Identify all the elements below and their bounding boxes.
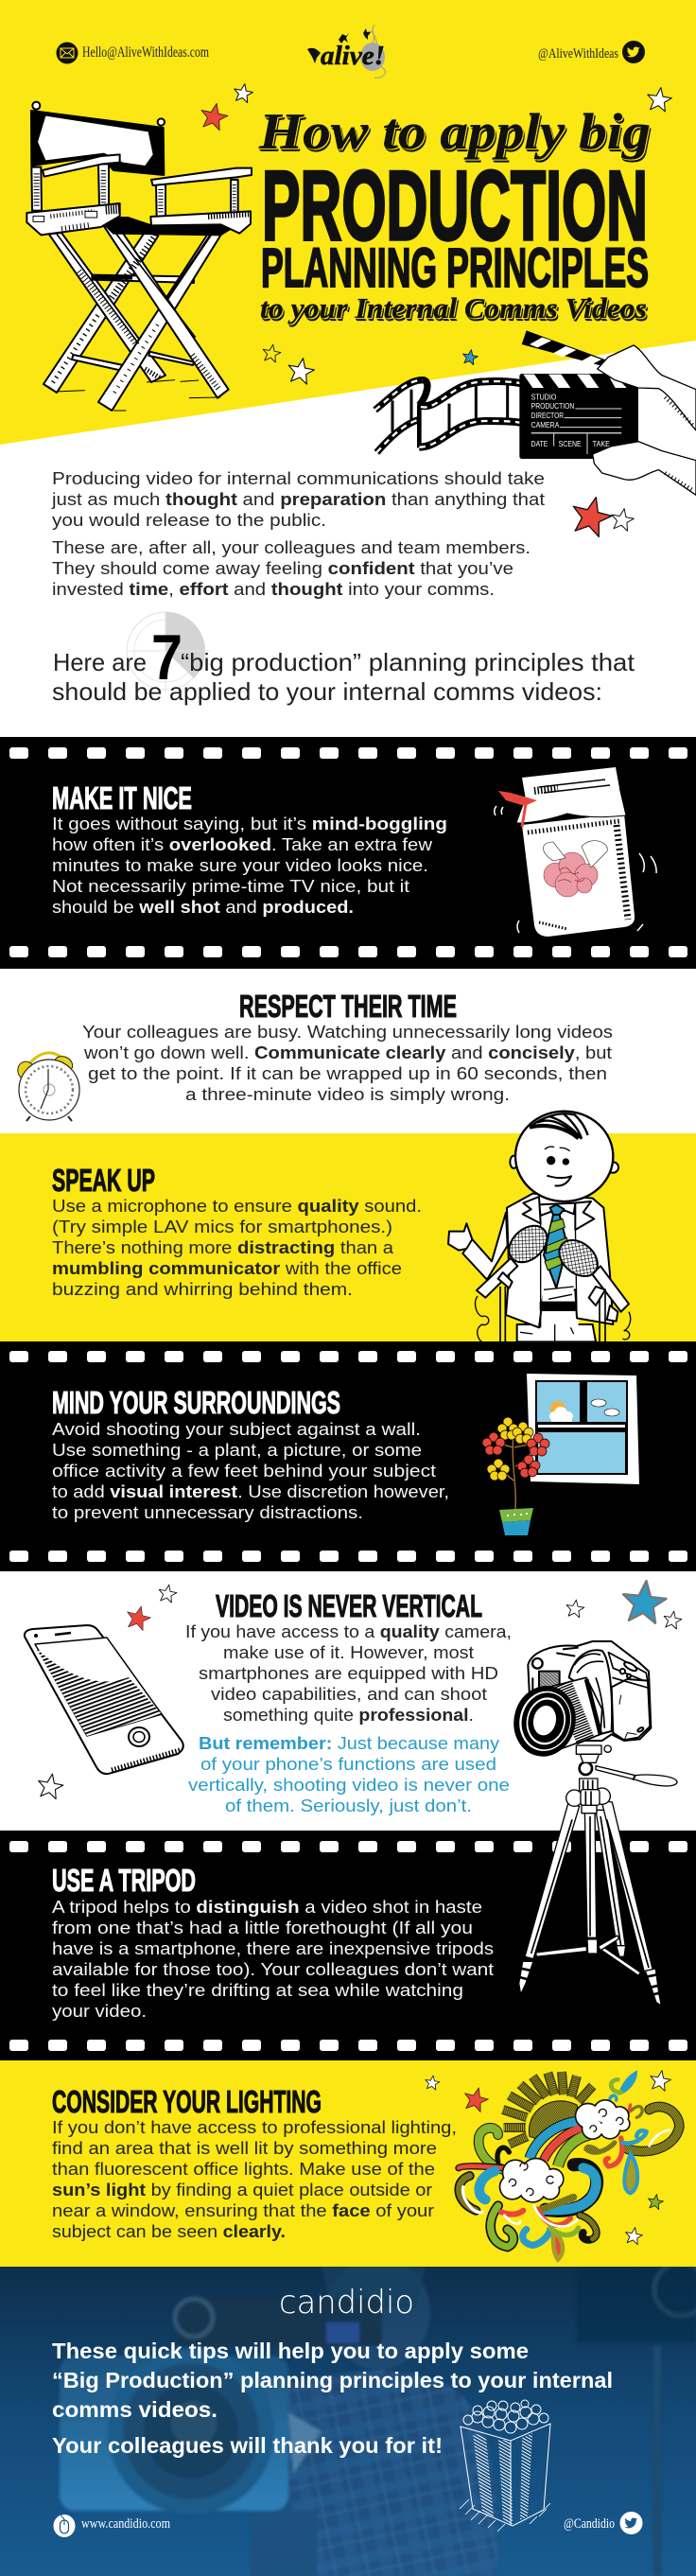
intro text: Producing video for internal communications should take xyxy=(52,468,545,488)
closing message: These quick tips will help you to apply some xyxy=(52,2339,529,2363)
tripod xyxy=(519,1745,677,2006)
body text: sun’s light by finding a quiet place outside or xyxy=(52,2180,432,2199)
body text: to prevent unnecessary distractions. xyxy=(52,1502,363,1522)
body text: near a window, ensuring that the face of your xyxy=(52,2200,434,2220)
body text: a three-minute video is simply wrong. xyxy=(185,1084,510,1104)
body text: your video. xyxy=(52,2001,147,2021)
camera body xyxy=(528,1641,651,1741)
body text: won’t go down well. Communicate clearly and concisely , but xyxy=(83,1043,612,1062)
icon: window xyxy=(527,1374,639,1484)
body text: A tripod helps to distinguish a video shot in haste xyxy=(52,1897,482,1917)
closing message: comms videos. xyxy=(52,2397,218,2422)
clapper board: TAKE xyxy=(593,439,610,448)
icon: popcorn xyxy=(460,2400,550,2532)
heading: CONSIDER YOUR LIGHTING xyxy=(52,2084,322,2119)
body text: from one that’s had a little forethought (If all you xyxy=(52,1918,473,1937)
sun disc xyxy=(529,2101,580,2140)
body text: find an area that is well lit by something more xyxy=(52,2138,437,2158)
body text: to add visual interest . Use discretion however, xyxy=(52,1481,449,1501)
lens xyxy=(508,1677,602,1761)
footer background photo: cameraman xyxy=(60,2256,696,2576)
logo: candidio: candidio xyxy=(279,2284,414,2322)
body text: smartphones are equipped with HD xyxy=(199,1663,498,1683)
body text: If you have access to a quality camera, xyxy=(185,1621,512,1641)
icon: alarm clock xyxy=(15,1053,79,1121)
footer: website: www.candidio.com xyxy=(81,2516,170,2532)
body text xyxy=(82,1022,613,1104)
main title: How to apply big xyxy=(258,103,651,160)
header stars xyxy=(199,82,673,538)
body text: (Try simple LAV mics for smartphones.) xyxy=(52,1217,392,1236)
panel: respect their time xyxy=(15,989,613,1121)
heading: here are 7 principles: Here are xyxy=(53,648,147,676)
body text xyxy=(185,1621,512,1725)
closing message xyxy=(52,2339,613,2458)
intro text: invested time, effort and thought into your comms. xyxy=(52,579,495,599)
illustration: director chair xyxy=(26,102,252,411)
body text: office activity a few feet behind your subject xyxy=(52,1461,436,1481)
body text: Avoid shooting your subject against a wall. xyxy=(52,1419,421,1439)
heading: RESPECT THEIR TIME xyxy=(239,989,457,1024)
body text: get to the point. If it can be wrapped up in 60 seconds, then xyxy=(88,1063,607,1083)
body text xyxy=(52,1897,494,2021)
callout: but remember xyxy=(188,1733,510,1815)
intro text: you would release to the public. xyxy=(52,510,326,530)
body text: If you don’t have access to professional lighting, xyxy=(52,2117,457,2137)
panel: make it nice xyxy=(0,737,696,969)
heading: SPEAK UP xyxy=(52,1163,155,1198)
clouds xyxy=(499,2099,631,2203)
intro text xyxy=(51,468,545,599)
closing message: “Big Production” planning principles to your internal xyxy=(52,2368,613,2392)
stars xyxy=(425,2069,672,2245)
body text: subject can be seen clearly. xyxy=(52,2221,286,2241)
body text: make use of it. However, most xyxy=(223,1642,474,1662)
header: twitter contact: @AliveWithIdeas xyxy=(538,46,618,61)
body text xyxy=(52,814,447,917)
body text: Your colleagues are busy. Watching unnecessarily long videos xyxy=(82,1022,613,1042)
body text: available for those too). Your colleagues don’t want xyxy=(52,1959,494,1979)
body text: Use something - a plant, a picture, or some xyxy=(52,1440,422,1460)
callout: but remember: of your phone’s functions are used xyxy=(200,1754,496,1774)
main title: to your Internal Comms Videos xyxy=(260,291,647,324)
heading: here are 7 principles xyxy=(52,622,635,706)
clapper board: SCENE xyxy=(559,439,582,448)
hands xyxy=(593,345,696,495)
illustration: man with microphones xyxy=(448,1112,631,1341)
body text: should be well shot and produced. xyxy=(52,897,354,917)
clapper board: DATE xyxy=(531,439,548,448)
callout: but remember: of them. Seriously, just don’t. xyxy=(225,1796,472,1815)
panel: video is never vertical xyxy=(25,1579,683,1815)
sun rays xyxy=(503,2072,593,2145)
header: twitter contact xyxy=(538,41,645,63)
body text: video capabilities, and can shoot xyxy=(211,1684,487,1704)
body text: how often it’s overlooked . Take an extra few xyxy=(52,834,433,854)
body text xyxy=(52,2117,457,2241)
body text: mumbling communicator with the office xyxy=(52,1258,402,1278)
header: email contact xyxy=(57,42,209,64)
heading: MAKE IT NICE xyxy=(52,780,192,815)
body text: Use a microphone to ensure quality sound. xyxy=(52,1196,422,1216)
callout: but remember: But remember: Just because many xyxy=(199,1733,500,1753)
footer: twitter: @Candidio xyxy=(564,2516,615,2532)
heading: here are 7 principles: “big production” planning principles that xyxy=(181,648,635,676)
icon: potted flowers xyxy=(482,1417,549,1535)
body text: to feel like they’re drifting at sea while watching xyxy=(52,1980,463,2000)
body text: Not necessarily prime-time TV nice, but it xyxy=(52,876,409,896)
body text: There’s nothing more distracting than a xyxy=(52,1237,394,1257)
intro text: They should come away feeling confident that you’ve xyxy=(52,558,513,578)
body text: have is a smartphone, there are inexpensive tripods xyxy=(52,1938,494,1958)
body text: buzzing and whirring behind them. xyxy=(52,1279,353,1299)
icon: film countdown circle xyxy=(127,612,210,692)
footer: website xyxy=(53,2515,170,2537)
footer: twitter xyxy=(564,2512,643,2534)
main title xyxy=(258,103,651,324)
icon: brain in a jar xyxy=(495,767,656,937)
body text: than fluorescent office lights. Make use of the xyxy=(52,2159,435,2179)
rainbow xyxy=(530,2121,589,2166)
clapper board xyxy=(519,374,638,459)
header yellow background xyxy=(0,0,696,445)
body text: minutes to make sure your video looks nice. xyxy=(52,855,428,875)
body text xyxy=(52,1419,449,1522)
heading: here are 7 principles: should be applied to your internal comms videos: xyxy=(52,677,602,706)
panel: consider your lighting xyxy=(0,2060,696,2267)
clapper board: DIRECTOR xyxy=(531,411,564,420)
panel: mind your surroundings xyxy=(0,1341,696,1571)
illustration: film strip and clapperboard xyxy=(375,330,696,495)
heading: here are 7 principles: 7 xyxy=(151,622,183,693)
illustration: camera on tripod xyxy=(508,1641,677,2006)
logo: alive xyxy=(307,25,385,78)
panel: speak up xyxy=(0,1112,696,1341)
body text: something quite professional . xyxy=(223,1705,474,1725)
icon: smartphone xyxy=(25,1625,183,1774)
clapper arm xyxy=(522,330,629,372)
panel: footer xyxy=(0,2256,696,2576)
film strip xyxy=(375,380,520,452)
intro text: just as much thought and preparation than anything that xyxy=(51,489,545,509)
header: email contact: Hello@AliveWithIdeas.com xyxy=(82,44,209,61)
callout: but remember: vertically, shooting video is never one xyxy=(188,1775,510,1795)
heading: USE A TRIPOD xyxy=(52,1863,196,1898)
panel: use a tripod xyxy=(0,1831,696,2060)
heading: VIDEO IS NEVER VERTICAL xyxy=(216,1588,482,1623)
clapper board: CAMERA xyxy=(531,420,560,429)
stars xyxy=(36,1579,683,1799)
logo: alive: alive! xyxy=(321,42,385,71)
illustration: sun, rainbow and clouds xyxy=(459,2070,679,2259)
intro text: These are, after all, your colleagues and team members. xyxy=(52,537,531,557)
body text xyxy=(52,1196,422,1299)
closing message: Your colleagues will thank you for it! xyxy=(52,2433,443,2458)
body text: It goes without saying, but it’s mind-boggling xyxy=(52,814,447,833)
heading: MIND YOUR SURROUNDINGS xyxy=(52,1385,340,1420)
swirls xyxy=(459,2070,679,2259)
clapper board: PRODUCTION xyxy=(531,401,574,411)
clapper board: STUDIO xyxy=(531,392,557,401)
